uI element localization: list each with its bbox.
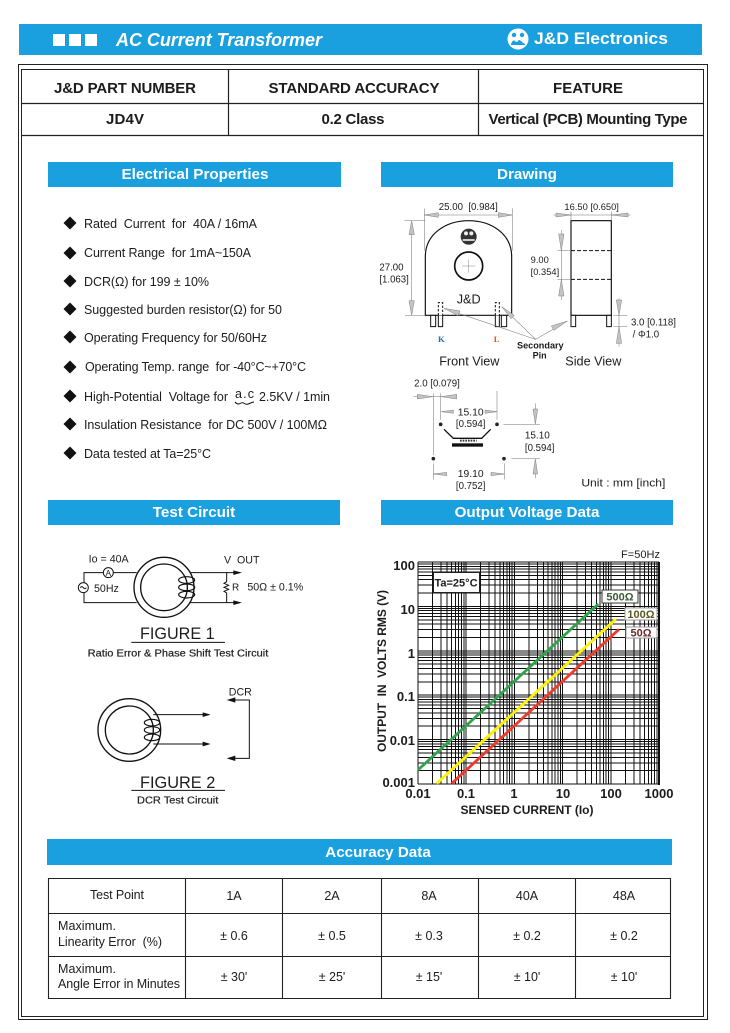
figure 1 caption: FIGURE 1 <box>140 624 215 643</box>
figure 2 caption: DCR Test Circuit <box>137 796 219 807</box>
x axis labels <box>405 786 673 801</box>
accuracy table: 2A <box>324 889 340 903</box>
figure 2 circuit: DCR <box>229 687 252 699</box>
y axis labels: 0.1 <box>397 689 415 704</box>
panel: accuracy data heading: Accuracy Data <box>325 844 431 861</box>
electrical properties list: Rated Current for 40A / 16mA <box>84 217 258 231</box>
figure 1 circuit: 50Ω ± 0.1% <box>247 582 304 594</box>
dimension lines and arrows: 27.00 <box>379 262 404 273</box>
part number table: J&D PART NUMBER <box>54 80 196 97</box>
accuracy table: 40A <box>516 889 539 903</box>
dimension lines and arrows: 16.50 [0.650] <box>564 202 619 212</box>
figure 2 caption <box>131 773 225 807</box>
accuracy table: ± 0.2 <box>610 929 638 943</box>
header banner <box>19 24 702 55</box>
figure 1 circuit: R <box>232 583 239 594</box>
figure 1 circuit: A <box>106 568 112 578</box>
accuracy table: Maximum. <box>58 962 116 976</box>
front view: Front View <box>439 355 500 369</box>
part number table: JD4V <box>106 111 144 128</box>
dimension lines and arrows: Secondary <box>517 340 564 350</box>
chart: output voltage vs sensed current <box>375 549 673 817</box>
electrical properties list: Current Range for 1mA~150A <box>84 246 252 260</box>
company name: J&D Electronics <box>534 29 668 48</box>
pin layout: 15.10 <box>458 407 484 418</box>
electrical properties list: Insulation Resistance for DC 500V / 100MΩ <box>84 418 327 432</box>
figure 2 circuit <box>98 687 252 761</box>
dimension lines and arrows: / Φ1.0 <box>633 329 659 340</box>
accuracy table: Angle Error in Minutes <box>58 977 180 991</box>
x axis labels: 1 <box>510 786 518 801</box>
side view: Side View <box>565 355 622 369</box>
part number table: FEATURE <box>553 80 623 97</box>
dimension lines and arrows: 3.0 [0.118] <box>631 317 676 328</box>
panel: drawing heading: Drawing <box>497 166 557 183</box>
accuracy table: Test Point <box>90 888 145 902</box>
panel: output voltage heading: Output Voltage Data <box>455 504 600 521</box>
panel: test circuit heading <box>48 500 340 525</box>
front view: K <box>438 334 445 344</box>
series labels: 50Ω <box>630 628 652 640</box>
part number table <box>22 70 704 136</box>
icon: three squares <box>53 34 97 46</box>
accuracy table: 8A <box>421 889 437 903</box>
pin layout: 2.0 [0.079] <box>414 378 460 389</box>
accuracy table: ± 0.6 <box>220 929 248 943</box>
electrical properties list: Suggested burden resistor(Ω) for 50 <box>84 303 282 317</box>
panel: drawing heading <box>381 162 673 187</box>
figure 1 circuit: 50Hz <box>94 583 119 595</box>
front view <box>425 221 512 369</box>
accuracy table: 48A <box>613 889 636 903</box>
front view: J&D <box>457 292 481 306</box>
panel: electrical properties heading <box>48 162 341 187</box>
figure 1 circuit: V OUT <box>224 555 260 567</box>
y axis labels: 1 <box>408 646 415 661</box>
pin layout: 15.10 <box>525 431 550 442</box>
mechanical drawing <box>379 202 676 492</box>
accuracy table: ± 10' <box>514 970 540 984</box>
frequency note: F=50Hz <box>621 549 660 561</box>
electrical properties list: 2.5KV / 1min <box>259 390 330 404</box>
pin layout: [0.752] <box>456 481 485 492</box>
y axis labels <box>382 558 415 790</box>
panel: accuracy data heading <box>47 839 672 865</box>
panel: electrical properties heading: Electrical Properties <box>122 166 268 183</box>
accuracy table: ± 0.2 <box>513 929 541 943</box>
y axis labels: 10 <box>401 602 415 617</box>
accuracy table: 1A <box>226 889 242 903</box>
axis titles: SENSED CURRENT (Io) <box>460 803 594 817</box>
accuracy table: ± 30' <box>221 970 247 984</box>
series labels: 100Ω <box>627 609 655 621</box>
x axis labels: 100 <box>600 786 622 801</box>
dimension lines and arrows: [0.354] <box>531 267 559 277</box>
figure 1 circuit: Io = 40A <box>89 554 130 566</box>
x axis labels: 10 <box>556 786 570 801</box>
accuracy table: ± 0.3 <box>415 929 443 943</box>
series lines <box>418 604 619 784</box>
accuracy table: Linearity Error (%) <box>58 935 162 949</box>
electrical properties list: a.c <box>235 387 254 401</box>
pin layout: [0.594] <box>525 443 554 454</box>
dimension lines and arrows: 25.00 [0.984] <box>439 202 498 213</box>
electrical properties list <box>64 216 330 461</box>
dimension lines and arrows: Pin <box>533 350 547 360</box>
dimension lines and arrows: 9.00 <box>531 255 549 265</box>
electrical properties list: DCR(Ω) for 199 ± 10% <box>84 275 209 289</box>
ambient temperature label: Ta=25°C <box>434 578 478 590</box>
figure 1 caption <box>88 624 269 659</box>
pin layout: 19.10 <box>458 469 484 480</box>
pin layout <box>413 378 665 492</box>
figure 1 circuit <box>78 554 304 617</box>
accuracy table: ± 0.5 <box>318 929 346 943</box>
y axis labels: 0.001 <box>382 775 415 790</box>
test circuits <box>78 554 304 807</box>
pin layout: [0.594] <box>456 419 485 430</box>
side view <box>557 221 622 369</box>
y axis labels: 100 <box>393 558 415 573</box>
electrical properties list: Operating Frequency for 50/60Hz <box>84 331 267 345</box>
series labels: 500Ω <box>606 592 634 604</box>
accuracy table: ± 15' <box>416 970 442 984</box>
accuracy table: ± 25' <box>319 970 345 984</box>
electrical properties list: Operating Temp. range for -40°C~+70°C <box>85 360 306 374</box>
dimension lines and arrows: [1.063] <box>379 275 409 286</box>
panel: test circuit heading: Test Circuit <box>153 504 235 521</box>
accuracy table <box>48 878 670 998</box>
part number table: Vertical (PCB) Mounting Type <box>488 111 688 128</box>
electrical properties list: High-Potential Voltage for <box>84 390 228 404</box>
banner title: AC Current Transformer <box>115 30 323 50</box>
accuracy table: Maximum. <box>58 919 116 933</box>
pin layout: Unit : mm [inch] <box>581 478 665 490</box>
electrical properties list: Data tested at Ta=25°C <box>84 447 211 461</box>
x axis labels: 1000 <box>645 786 673 801</box>
x axis labels: 0.01 <box>405 786 431 801</box>
ambient temperature label <box>434 572 480 592</box>
x axis labels: 0.1 <box>457 786 475 801</box>
figure 1 caption: Ratio Error & Phase Shift Test Circuit <box>88 648 269 659</box>
part number table: 0.2 Class <box>322 111 384 128</box>
figure 2 caption: FIGURE 2 <box>140 773 215 792</box>
grid <box>418 562 659 785</box>
y axis labels: 0.01 <box>390 733 415 748</box>
series labels <box>602 590 657 640</box>
chart: output voltage vs sensed current: OUTPUT IN VOLTS RMS (V) <box>375 590 389 752</box>
icon: company logo <box>508 28 528 50</box>
dimension lines and arrows <box>379 202 676 360</box>
accuracy table: ± 10' <box>611 970 637 984</box>
part number table: STANDARD ACCURACY <box>268 80 440 97</box>
front view: L <box>494 334 500 344</box>
panel: output voltage heading <box>381 500 673 525</box>
